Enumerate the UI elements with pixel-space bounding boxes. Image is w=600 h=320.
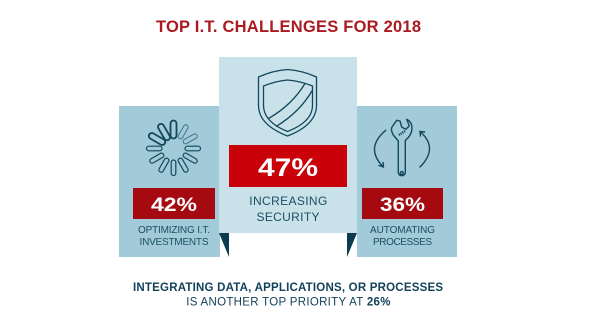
label: increasing security: INCREASING xyxy=(249,194,327,208)
icon: loading spinner xyxy=(146,120,200,176)
label: optimizing I.T. investments xyxy=(138,225,210,248)
panel: optimizing I.T. investments xyxy=(119,106,220,257)
title: TOP I.T. CHALLENGES FOR 2018 xyxy=(156,18,421,36)
red stat box: 42% xyxy=(133,188,215,219)
footer note: IS ANOTHER TOP PRIORITY AT 26% xyxy=(186,296,391,308)
red stat box: 42%: 42% xyxy=(151,195,197,216)
icon: wrench with rotation arrows xyxy=(374,119,430,176)
label: automating processes: PROCESSES xyxy=(373,237,432,248)
red stat box: 36%: 36% xyxy=(380,195,425,216)
label: automating processes xyxy=(370,225,435,248)
label: automating processes: AUTOMATING xyxy=(370,225,435,236)
footer note: INTEGRATING DATA, APPLICATIONS, OR PROCESSES xyxy=(133,282,443,294)
ribbon fold: left xyxy=(219,233,229,257)
label: increasing security: SECURITY xyxy=(256,210,320,224)
panel: automating processes xyxy=(357,106,457,257)
label: optimizing I.T. investments: INVESTMENTS xyxy=(140,237,209,248)
red stat box: 47%: 47% xyxy=(258,154,318,182)
label: optimizing I.T. investments: OPTIMIZING I.T. xyxy=(138,225,210,236)
footer note xyxy=(133,282,443,308)
red stat box: 47% xyxy=(229,145,347,187)
icon: shield xyxy=(258,70,316,136)
panel: increasing security xyxy=(219,57,357,233)
ribbon fold: right xyxy=(347,233,357,257)
label: increasing security xyxy=(249,194,327,224)
red stat box: 36% xyxy=(362,188,443,219)
